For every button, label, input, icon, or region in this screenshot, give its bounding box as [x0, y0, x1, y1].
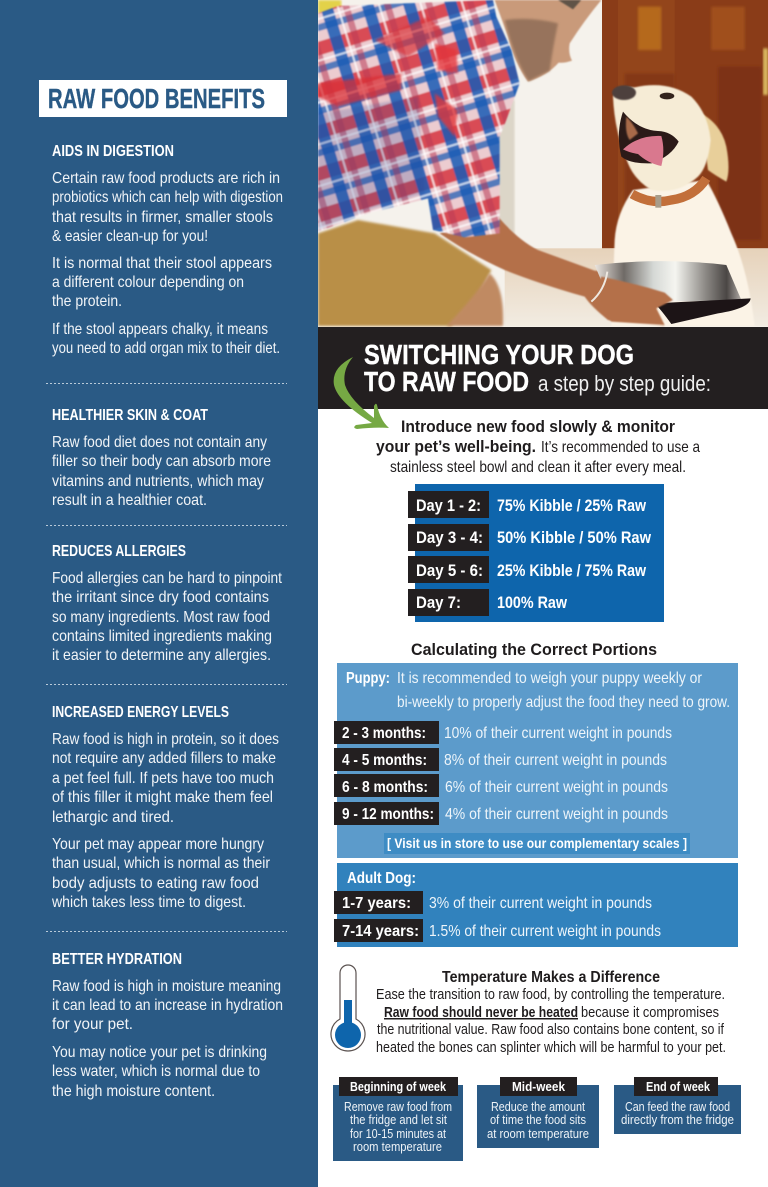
text: temperature makes a difference [376, 969, 726, 1056]
row: 2-3 months: 10% of their current weight in pounds [444, 725, 672, 742]
section: reduces allergies: the irritant since dry food contains [52, 589, 269, 606]
section: healthier skin and coat: filler so their body can absorb more [52, 453, 271, 470]
bowl [595, 261, 741, 302]
man: head and neck [495, 0, 601, 82]
card: beginning of week [333, 1077, 463, 1161]
card: mid-week: at room temperature [487, 1127, 589, 1141]
section: better hydration [52, 951, 283, 1100]
section: increased energy levels [51, 704, 279, 911]
row: 4-5 months: 4 - 5 months: [342, 752, 427, 769]
section: aids in digestion: AIDS IN DIGESTION [52, 143, 174, 160]
section: aids in digestion: probiotics which can help with digestion [52, 189, 283, 206]
text: introduction: Introduce new food slowly & monitor [401, 417, 675, 436]
dog: body [611, 180, 755, 326]
text: introduction: your pet’s well-being. [376, 437, 536, 456]
row: 2-3 months [334, 721, 672, 744]
section: aids in digestion: It is normal that their stool appears [52, 255, 272, 272]
section: aids in digestion: If the stool appears chalky, it means [52, 321, 268, 338]
section: better hydration: You may notice your pet is drinking [52, 1044, 267, 1061]
section: aids in digestion [52, 143, 283, 357]
dog: tongue [623, 136, 663, 166]
section: healthier skin and coat: Raw food diet does not contain any [52, 434, 267, 451]
section: healthier skin and coat: HEALTHIER SKIN & COAT [52, 407, 208, 424]
text: temperature makes a difference: Temperature Makes a Difference [442, 969, 660, 986]
section: aids in digestion: the protein. [52, 293, 122, 310]
title band: switching your dog to raw food: a step by step guide: [538, 371, 711, 396]
row: day 3-4: 50% Kibble / 50% Raw [497, 528, 652, 547]
card: beginning of week: for 10-15 minutes at [350, 1127, 446, 1141]
row: 4-5 months: 8% of their current weight in pounds [444, 752, 667, 769]
row: 9-12 months [334, 802, 668, 825]
man: shorts [318, 220, 491, 326]
section: increased energy levels: not require any added fillers to make [52, 750, 276, 767]
row: day 7: 100% Raw [497, 593, 568, 612]
row: day 7 [408, 589, 568, 616]
dog: mouth [619, 112, 679, 163]
title band: switching your dog to raw food: SWITCHING YOUR DOG [364, 339, 634, 370]
panel: puppy portions: It is recommended to weigh your puppy weekly or [397, 670, 703, 687]
heading: calculating the correct portions: Calculating the Correct Portions [411, 640, 657, 659]
row: day 1-2 [408, 491, 647, 518]
card: beginning of week: Remove raw food from [344, 1100, 452, 1114]
row: 6-8 months [334, 774, 668, 797]
text: temperature makes a difference: because it compromises [581, 1004, 719, 1021]
section: reduces allergies [52, 543, 282, 664]
row: day 5-6: Day 5 - 6: [416, 561, 483, 580]
card: mid-week: of time the food sits [490, 1113, 586, 1127]
section: increased energy levels: a pet feel full. If pets have too much [52, 770, 274, 787]
section: increased energy levels: INCREASED ENERGY LEVELS [52, 704, 229, 721]
dog: eye [660, 93, 674, 99]
card: end of week [614, 1077, 741, 1134]
text: temperature makes a difference: Raw food should never be heated [384, 1004, 578, 1021]
section: better hydration: the high moisture content. [52, 1083, 215, 1100]
icon: thermometer [331, 965, 365, 1051]
row: 1-7 years: 3% of their current weight in pounds [429, 895, 652, 912]
section: increased energy levels: which takes less time to digest. [51, 894, 246, 911]
section: reduces allergies: so many ingredients. Most raw food [52, 609, 270, 626]
section: reduces allergies: contains limited ingredients making [52, 628, 272, 645]
card: end of week: End of week [646, 1080, 710, 1094]
section: aids in digestion: a different colour depending on [52, 274, 244, 291]
section: healthier skin and coat [52, 407, 271, 509]
card: beginning of week: room temperature [353, 1140, 442, 1154]
row: day 5-6: 25% Kibble / 75% Raw [497, 561, 647, 580]
section: aids in digestion: & easier clean-up for you! [52, 228, 208, 245]
man: knee [446, 273, 503, 326]
card: end of week: directly from the fridge [621, 1113, 734, 1127]
dog: nose [612, 85, 636, 100]
heading: raw food benefits: RAW FOOD BENEFITS [48, 83, 265, 114]
row: 9-12 months: 9 - 12 months: [342, 806, 434, 823]
section: better hydration: Raw food is high in moisture meaning [52, 978, 281, 995]
arrow: green curved [334, 357, 389, 429]
row: 7-14 years [334, 919, 661, 942]
row: 1-7 years [334, 891, 652, 914]
row: day 5-6 [408, 556, 647, 583]
section: increased energy levels: than usual, which is normal as their [52, 855, 271, 872]
row: 1-7 years: 1-7 years: [342, 895, 411, 912]
man: arm and hand [440, 217, 673, 326]
heading: raw food benefits [39, 80, 287, 117]
text: introduction: stainless steel bowl and clean it after every meal. [390, 459, 686, 476]
panel: adult dog portions: Adult Dog: [347, 870, 416, 887]
row: day 1-2: Day 1 - 2: [416, 496, 481, 515]
section: aids in digestion: you need to add organ mix to their diet. [52, 340, 280, 357]
section: better hydration: it can lead to an increase in hydration [52, 997, 283, 1014]
section: reduces allergies: REDUCES ALLERGIES [52, 543, 186, 560]
day schedule table [408, 484, 664, 622]
section: better hydration: less water, which is normal due to [52, 1063, 260, 1080]
row: 6-8 months: 6 - 8 months: [342, 779, 428, 796]
card: mid-week [477, 1077, 599, 1148]
dog: head [613, 85, 711, 191]
row: 4-5 months [334, 748, 667, 771]
photo: man feeding a dog [318, 0, 768, 327]
section: reduces allergies: it easier to determine any allergies. [52, 647, 271, 664]
section: reduces allergies: Food allergies can be hard to pinpoint [52, 570, 282, 587]
row: 7-14 years: 1.5% of their current weight in pounds [429, 923, 661, 940]
section: increased energy levels: lethargic and tired. [52, 809, 174, 826]
callout: visit us in store: [ Visit us in store to use our complementary scales ] [387, 835, 687, 851]
panel: puppy portions [334, 663, 738, 858]
row: 9-12 months: 4% of their current weight in pounds [445, 806, 668, 823]
section: increased energy levels: Raw food is high in protein, so it does [52, 731, 279, 748]
row: 2-3 months: 2 - 3 months: [342, 725, 426, 742]
text: introduction: It’s recommended to use a [541, 439, 700, 456]
row: 6-8 months: 6% of their current weight in pounds [445, 779, 668, 796]
section: increased energy levels: Your pet may appear more hungry [52, 836, 264, 853]
section: healthier skin and coat: result in a healthier coat. [52, 492, 207, 509]
card: beginning of week: Beginning of week [350, 1080, 446, 1094]
section: better hydration: for your pet. [52, 1016, 133, 1033]
section: increased energy levels: body adjusts to eating raw food [52, 875, 259, 892]
section: healthier skin and coat: vitamins and nutrients, which may [52, 473, 264, 490]
dog: collar [632, 178, 706, 202]
section: aids in digestion: that results in firmer, smaller stools [52, 209, 273, 226]
card: end of week: Can feed the raw food [625, 1100, 730, 1114]
card: mid-week: Reduce the amount [491, 1100, 585, 1114]
man: plaid shirt [318, 0, 520, 237]
dog: ear [703, 114, 730, 182]
section: better hydration: BETTER HYDRATION [52, 951, 182, 968]
callout: visit us in store [384, 833, 690, 854]
card: beginning of week: the fridge and let sit [350, 1113, 447, 1127]
row: 7-14 years: 7-14 years: [342, 923, 419, 940]
row: day 3-4 [408, 524, 652, 551]
row: day 7: Day 7: [416, 593, 461, 612]
title band: switching your dog to raw food [318, 327, 768, 409]
panel: puppy portions: Puppy: [346, 670, 390, 687]
man: fingers [598, 277, 673, 325]
row: day 1-2: 75% Kibble / 25% Raw [497, 496, 647, 515]
section: aids in digestion: Certain raw food products are rich in [52, 170, 280, 187]
section: increased energy levels: of this filler it might make them feel [52, 789, 273, 806]
panel: adult dog portions [334, 863, 738, 947]
panel: raw food benefits [0, 0, 318, 1187]
text: introduction [376, 417, 700, 476]
card: mid-week: Mid-week [512, 1080, 565, 1094]
title band: switching your dog to raw food: TO RAW FOOD [364, 366, 529, 397]
row: day 3-4: Day 3 - 4: [416, 528, 483, 547]
